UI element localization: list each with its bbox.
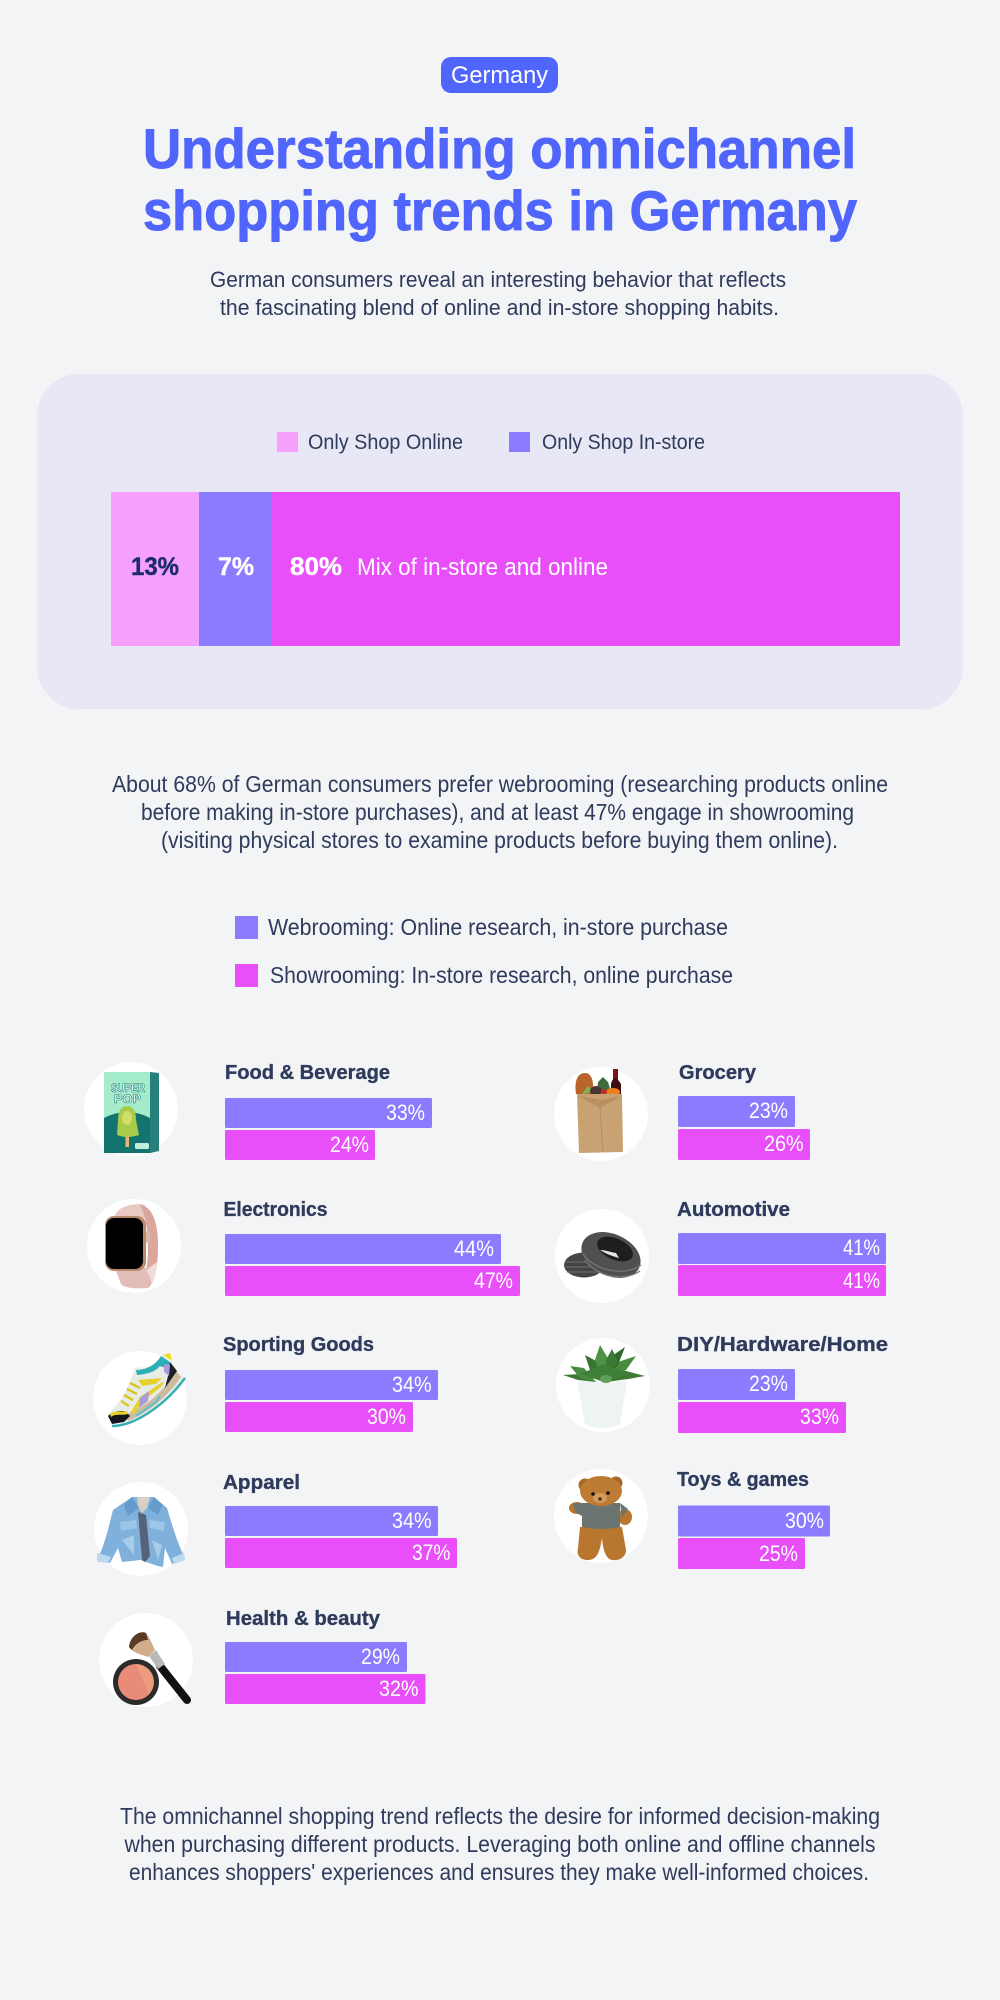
legend: only shop online / in-store: Only Shop Online	[308, 431, 463, 454]
category label: Food & Beverage	[225, 1061, 390, 1084]
bars: 30% and 25%: 30%	[785, 1508, 824, 1533]
badge: Germany: Germany	[451, 62, 548, 89]
title: Understanding omnichannel	[143, 117, 856, 180]
closing text: when purchasing different products. Leveraging both online and offline channels	[124, 1831, 876, 1857]
bars: 34% and 37%: 34%	[392, 1508, 432, 1533]
category: food and beverage	[84, 1061, 432, 1160]
intro text: the fascinating blend of online and in-store shopping habits.	[220, 295, 779, 320]
category: health and beauty	[99, 1607, 426, 1707]
title: shopping trends in Germany	[143, 179, 857, 242]
category: diy hardware home	[556, 1333, 888, 1433]
icon: stacked tires	[555, 1209, 649, 1303]
category label: Grocery	[679, 1061, 757, 1084]
legend: webrooming and showrooming: Webrooming: Online research, in-store purchase	[268, 914, 728, 940]
icon: popsicle box: SUPER	[111, 1081, 145, 1095]
legend: only shop online / in-store	[277, 431, 705, 454]
icon: popsicle box	[84, 1062, 178, 1156]
badge: Germany	[441, 57, 558, 93]
category label: Health & beauty	[226, 1607, 381, 1630]
legend: only shop online / in-store: Only Shop In-store	[542, 431, 705, 454]
closing text: The omnichannel shopping trend reflects the desire for informed decision-making	[120, 1803, 880, 1829]
category label: DIY/Hardware/Home	[677, 1333, 888, 1356]
stacked bar: 13% 7% 80%: 13%	[131, 553, 179, 581]
category label: Electronics	[224, 1198, 328, 1221]
bars: 34% and 37%: 37%	[412, 1540, 450, 1565]
icon: popsicle box: POP	[114, 1092, 141, 1106]
bars: 41% and 41%	[678, 1233, 886, 1296]
bars: 33% and 24%: 33%	[386, 1100, 425, 1125]
bars: 44% and 47%: 44%	[454, 1236, 494, 1261]
legend: webrooming and showrooming: Showrooming: In-store research, online purchase	[270, 962, 733, 988]
intro text	[210, 267, 786, 320]
bars: 23% and 33%	[678, 1369, 846, 1433]
intro text: German consumers reveal an interesting behavior that reflects	[210, 267, 786, 292]
icon: denim jacket	[94, 1482, 188, 1576]
stacked bar: 13% 7% 80%: Mix of in-store and online	[357, 554, 608, 581]
stacked bar: 13% 7% 80%: 80%	[290, 553, 342, 581]
bars: 23% and 26%: 23%	[749, 1098, 788, 1123]
category label: Toys & games	[677, 1468, 809, 1491]
bars: 41% and 41%: 41%	[843, 1268, 880, 1293]
category label: Apparel	[223, 1471, 300, 1494]
closing text: enhances shoppers' experiences and ensures they make well-informed choices.	[129, 1859, 869, 1885]
stacked bar: 13% 7% 80%	[111, 492, 900, 646]
title	[143, 117, 857, 242]
icon: teddy bear	[554, 1469, 648, 1563]
bars: 34% and 30%: 30%	[367, 1404, 406, 1429]
icon: smart watch	[87, 1199, 181, 1293]
category label: Automotive	[677, 1198, 790, 1221]
category: apparel	[94, 1471, 457, 1576]
bars: 29% and 32%	[225, 1642, 426, 1704]
bars: 41% and 41%: 41%	[843, 1235, 880, 1260]
webrooming and showrooming text	[112, 771, 888, 853]
bars: 23% and 33%: 23%	[749, 1371, 788, 1396]
bars: 44% and 47%	[225, 1234, 520, 1296]
bars: 34% and 37%	[225, 1506, 457, 1568]
category: electronics	[87, 1198, 520, 1296]
bars: 30% and 25%	[678, 1506, 830, 1569]
stacked bar: 13% 7% 80%: 7%	[218, 553, 254, 581]
icon: blush compact and brush	[99, 1613, 193, 1707]
icon: grocery bag	[554, 1067, 648, 1161]
bars: 34% and 30%: 34%	[392, 1372, 432, 1397]
legend: webrooming and showrooming	[235, 914, 733, 988]
bars: 44% and 47%: 47%	[474, 1268, 513, 1293]
bars: 33% and 24%	[225, 1098, 432, 1160]
category: sporting goods	[93, 1333, 438, 1445]
category: automotive	[555, 1198, 886, 1303]
bars: 34% and 30%	[225, 1370, 438, 1432]
bars: 23% and 26%: 26%	[764, 1131, 804, 1156]
bars: 29% and 32%: 29%	[361, 1644, 400, 1669]
bars: 30% and 25%: 25%	[759, 1541, 798, 1566]
closing text	[120, 1803, 880, 1885]
bars: 23% and 33%: 33%	[800, 1404, 839, 1429]
webrooming and showrooming text: About 68% of German consumers prefer webrooming (researching products online	[112, 771, 888, 797]
icon: running shoe	[93, 1351, 187, 1445]
category: grocery	[554, 1061, 810, 1161]
webrooming and showrooming text: (visiting physical stores to examine products before buying them online).	[161, 827, 838, 853]
bars: 23% and 26%	[678, 1096, 810, 1160]
panel: shopper split	[37, 374, 963, 709]
icon: potted succulent	[556, 1338, 650, 1432]
bars: 29% and 32%: 32%	[379, 1676, 418, 1701]
webrooming and showrooming text: before making in-store purchases), and at least 47% engage in showrooming	[141, 799, 854, 825]
category: toys and games	[554, 1468, 830, 1569]
bars: 33% and 24%: 24%	[330, 1132, 369, 1157]
category label: Sporting Goods	[223, 1333, 374, 1356]
